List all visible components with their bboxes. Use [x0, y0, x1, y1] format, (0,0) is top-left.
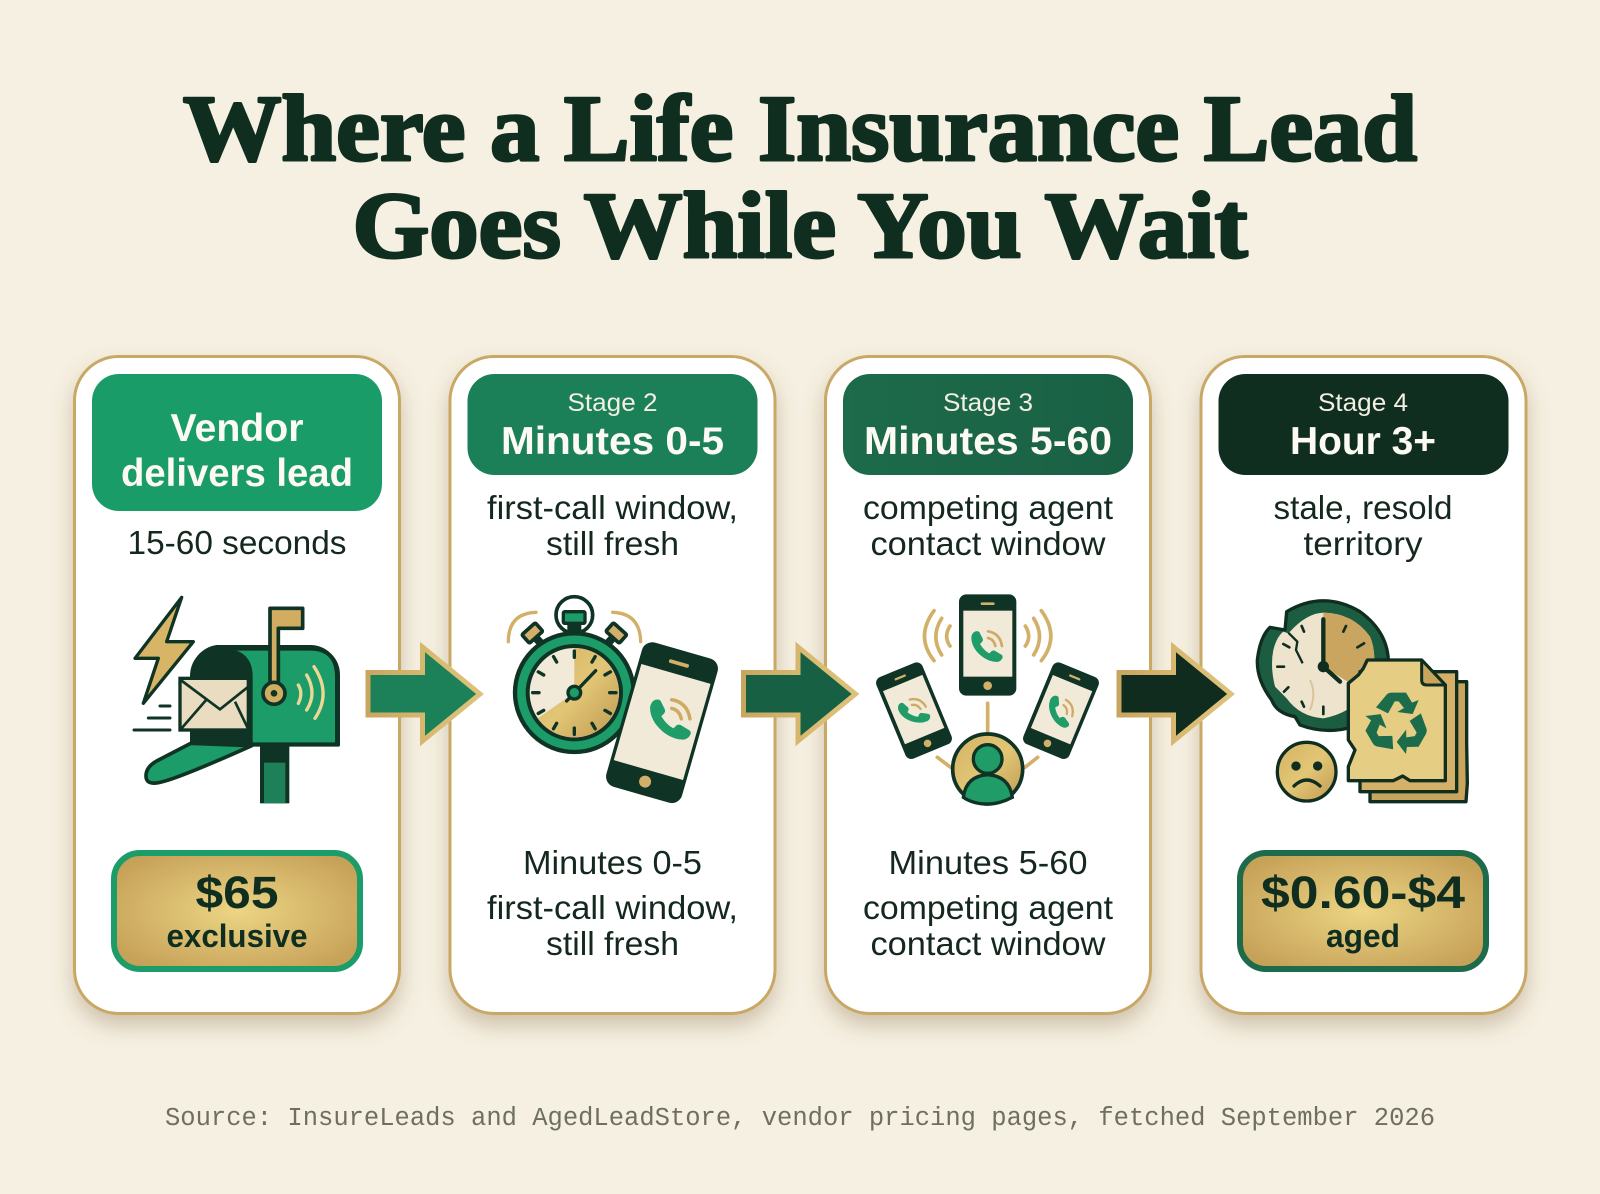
panel: stage 4 hour 3+	[1201, 356, 1526, 1014]
header: stage 3: Stage 3	[943, 389, 1033, 417]
header: stage 2: Stage 2	[568, 389, 658, 417]
text: stage 2 description: first-call window,	[487, 489, 738, 526]
icon: stopwatch with phone	[508, 597, 720, 806]
text: stage 3 description: competing agent	[863, 489, 1113, 526]
price badge: aged: $0.60-$4	[1261, 867, 1465, 918]
header: stage 4: Stage 4	[1318, 389, 1408, 417]
header: stage 4: Hour 3+	[1290, 420, 1436, 463]
header: vendor delivers lead: delivers lead	[121, 452, 353, 495]
text: timing: 15-60 seconds	[128, 524, 346, 561]
title	[183, 77, 1417, 278]
text: stage 4 description	[1274, 489, 1452, 562]
text: stage 3 description: contact window	[870, 525, 1106, 562]
arrow: stage 1 to stage 2	[368, 647, 480, 741]
text: stage 3 detail: competing agent	[863, 889, 1113, 926]
arrow: stage 3 to stage 4	[1119, 647, 1231, 741]
text: stage 2 description: still fresh	[546, 525, 679, 562]
panel: stage 3 minutes 5-60	[826, 356, 1150, 1014]
price badge: $65 exclusive: $65	[196, 867, 278, 918]
text: stage 4 description: territory	[1304, 525, 1423, 562]
header: stage 3: Minutes 5-60	[864, 420, 1112, 463]
title: Goes While You Wait	[352, 174, 1248, 278]
header: stage 4	[1218, 374, 1508, 475]
text: stage 2 detail: Minutes 0-5	[523, 844, 702, 881]
header: stage 2: Minutes 0-5	[501, 420, 724, 463]
header: vendor delivers lead: Vendor	[170, 407, 304, 450]
text: stage 3 detail	[863, 844, 1113, 962]
panel: stage 1 vendor delivers lead	[74, 356, 400, 1014]
header: stage 2	[468, 374, 758, 475]
icon: mailbox with envelope and lightning	[134, 597, 338, 803]
price badge: $65 exclusive: exclusive	[166, 918, 308, 954]
header: vendor delivers lead	[92, 374, 382, 511]
text: stage 2 detail: still fresh	[546, 925, 679, 962]
title: Where a Life Insurance Lead	[183, 77, 1417, 181]
text: stage 2 description	[487, 489, 738, 562]
header: stage 3	[843, 374, 1133, 475]
text: stage 3 detail: Minutes 5-60	[888, 844, 1088, 881]
text: stage 3 description	[863, 489, 1113, 562]
text: stage 4 description: stale, resold	[1274, 489, 1452, 526]
price badge: $65 exclusive	[114, 853, 360, 969]
text: stage 3 detail: contact window	[870, 925, 1106, 962]
arrow: stage 2 to stage 3	[744, 647, 856, 741]
icon: cracked clock, recycled papers, sad face	[1257, 601, 1467, 802]
icon: three phones and agent	[874, 594, 1101, 804]
source note: Source: InsureLeads and AgedLeadStore, vendor pricing pages, fetched September 2026	[165, 1104, 1435, 1133]
price badge: aged: aged	[1326, 918, 1400, 954]
text: stage 2 detail: first-call window,	[487, 889, 738, 926]
text: stage 2 detail	[487, 844, 738, 962]
panel: stage 2 minutes 0-5	[450, 356, 775, 1014]
price badge: aged	[1240, 853, 1486, 969]
